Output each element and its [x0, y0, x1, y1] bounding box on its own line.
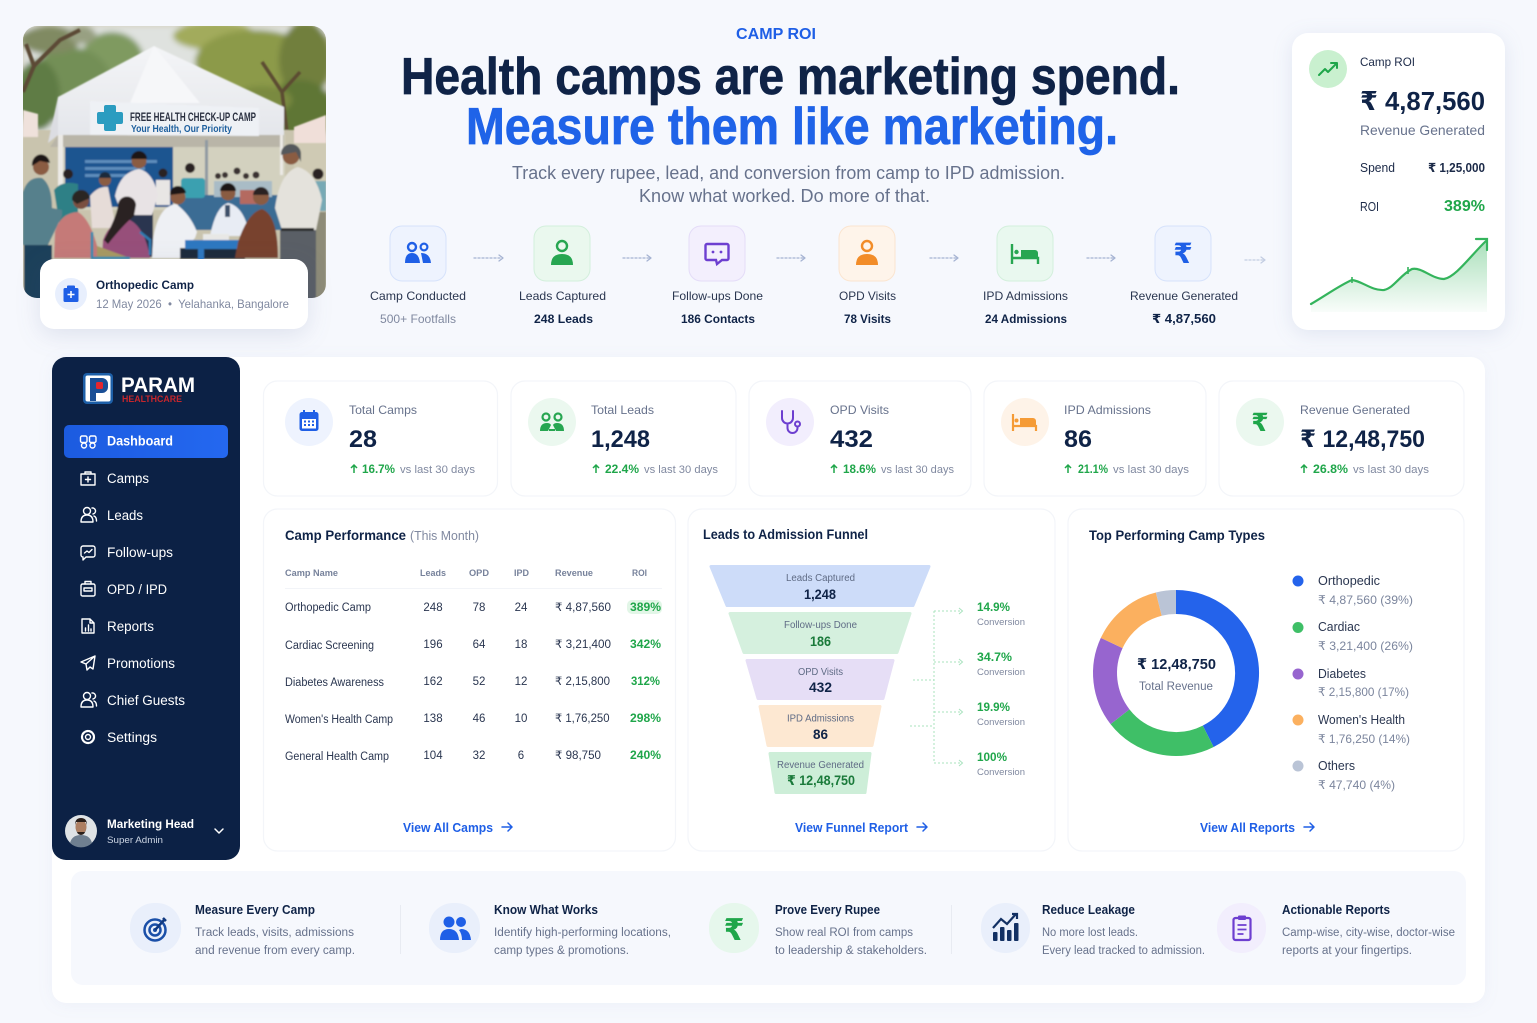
table rows: 18	[515, 639, 527, 651]
person: doctor facing	[210, 203, 250, 236]
legend: Cardiac	[1318, 620, 1360, 634]
funnel chart	[711, 566, 929, 792]
step: OPD visits	[839, 226, 896, 326]
KPI: total leads: Total Leads	[591, 403, 654, 417]
table header: Leads	[420, 568, 446, 578]
table rows: 196	[423, 639, 443, 651]
nav: reports: Reports	[107, 619, 154, 634]
table rows: 298%	[630, 713, 661, 725]
legend: ₹ 4,87,560 (39%)	[1318, 593, 1413, 607]
benefit: reduce leakage: Reduce Leakage	[1042, 903, 1135, 917]
KPI: total leads: 22.4%	[605, 464, 639, 476]
table rows: 312%	[631, 676, 660, 688]
person: seated pink	[54, 212, 100, 258]
conversion labels: 19.9%	[977, 700, 1010, 714]
KPI: IPD admissions: 86	[1064, 426, 1092, 453]
KPI: revenue generated: 26.8%	[1313, 464, 1348, 476]
KPI: OPD visits	[749, 381, 971, 496]
camp date and location: 12 May 2026 • Yelahanka, Bangalore	[96, 297, 289, 311]
person: white coat	[90, 187, 116, 228]
ROI row: ROI	[1360, 200, 1379, 214]
step: follow-ups done: Follow-ups Done	[672, 289, 763, 303]
table rows: ₹ 3,21,400	[555, 639, 611, 651]
nav: follow-ups: Follow-ups	[107, 545, 173, 560]
table rows	[285, 602, 661, 763]
funnel chart: ₹ 12,48,750	[787, 773, 855, 788]
step: revenue generated: ₹ 4,87,560	[1152, 312, 1216, 326]
table rows: 342%	[630, 639, 661, 651]
table rows: 32	[473, 750, 485, 762]
sparkline chart	[1311, 239, 1487, 312]
funnel chart: Leads Captured	[786, 573, 855, 584]
donut chart	[1105, 602, 1247, 744]
headline: Health camps are marketing spend.	[401, 48, 1180, 106]
benefit: know what works: Identify high-performing locations,	[494, 927, 671, 939]
user profile: Marketing Head	[107, 817, 194, 831]
KPI: revenue generated: Revenue Generated	[1300, 403, 1410, 417]
benefit: know what works	[429, 903, 671, 957]
heading: Camp Performance	[285, 528, 406, 543]
funnel chart: Revenue Generated	[777, 760, 864, 771]
subtitle	[512, 163, 1065, 206]
heading: Top Performing Camp Types	[1089, 528, 1265, 543]
table rows: Orthopedic Camp	[285, 602, 371, 614]
user profile	[65, 815, 223, 847]
link: view all camps: View All Camps	[403, 821, 493, 835]
donut centre: Total Revenue	[1139, 681, 1213, 693]
subtitle: Know what worked. Do more of that.	[639, 186, 930, 206]
step: IPD admissions	[983, 226, 1068, 326]
conversion labels: Conversion	[977, 717, 1025, 728]
step: revenue generated: Revenue Generated	[1130, 289, 1238, 303]
icon: hospital clipboard	[64, 286, 78, 302]
step: IPD admissions: 24 Admissions	[985, 312, 1067, 326]
table rows: 52	[473, 676, 485, 688]
step: revenue generated	[1130, 226, 1238, 326]
headline	[401, 48, 1180, 156]
benefit: actionable reports: reports at your fingertips.	[1282, 945, 1412, 957]
table rows: 162	[423, 676, 443, 688]
conversion labels: 100%	[977, 750, 1007, 764]
benefit: measure every camp	[130, 903, 355, 957]
table rows: 46	[473, 713, 485, 725]
KPI: total leads: 1,248	[591, 426, 650, 453]
legend: Others	[1318, 759, 1355, 773]
legend	[1292, 574, 1413, 792]
benefit: know what works: Know What Works	[494, 903, 598, 917]
conversion labels: 34.7%	[977, 650, 1012, 664]
panel: top performing camp types	[1068, 509, 1464, 851]
step: follow-ups done	[672, 226, 763, 326]
label: Camp ROI	[1360, 55, 1415, 69]
spend row	[1360, 161, 1485, 175]
table rows: 10	[515, 713, 527, 725]
cross icon	[97, 105, 123, 131]
banner heading: FREE HEALTH CHECK-UP CAMP	[130, 110, 256, 124]
conversion labels	[977, 600, 1025, 778]
subtitle: Track every rupee, lead, and conversion from camp to IPD admission.	[512, 163, 1065, 183]
person: doctor back	[152, 204, 197, 258]
link: view funnel report: View Funnel Report	[795, 821, 909, 835]
KPI: total camps	[264, 381, 498, 496]
benefit: measure every camp: and revenue from every camp.	[195, 945, 355, 957]
table header: OPD	[469, 568, 489, 578]
logo: HEALTHCARE	[122, 394, 182, 404]
step: leads captured: Leads Captured	[519, 289, 606, 303]
sidebar	[52, 357, 240, 860]
nav: dashboard active: Dashboard	[107, 434, 173, 448]
conversion labels: 14.9%	[977, 600, 1010, 614]
spend row: ₹ 1,25,000	[1428, 161, 1485, 175]
panel: funnel	[688, 509, 1055, 851]
step: camp conducted: 500+ Footfalls	[380, 312, 456, 326]
KPI: total leads	[511, 381, 736, 496]
nav: OPD / IPD: OPD / IPD	[107, 582, 167, 597]
chairs	[92, 232, 130, 258]
benefit: reduce leakage: No more lost leads.	[1042, 927, 1138, 939]
benefit: actionable reports: Actionable Reports	[1282, 903, 1390, 917]
person: left man	[24, 245, 52, 300]
legend: ₹ 3,21,400 (26%)	[1318, 639, 1413, 653]
benefit: prove every rupee	[709, 903, 927, 957]
table rows: Cardiac Screening	[285, 640, 374, 652]
arrow	[777, 255, 805, 261]
nav: settings: Settings	[107, 730, 157, 745]
legend: ₹ 1,76,250 (14%)	[1318, 732, 1410, 746]
conversion labels: Conversion	[977, 767, 1025, 778]
table rows: 248	[423, 602, 443, 614]
KPI: total camps: Total Camps	[349, 403, 417, 417]
donut centre	[1137, 656, 1216, 693]
benefit: measure every camp: Measure Every Camp	[195, 903, 315, 917]
table rows: 12	[515, 676, 527, 688]
person: right man	[280, 230, 316, 302]
table rows: 104	[423, 750, 443, 762]
table header: Camp Name	[285, 568, 338, 578]
table rows: Diabetes Awareness	[285, 677, 384, 689]
benefit: know what works: camp types & promotions.	[494, 945, 629, 957]
KPI: total camps: 16.7%	[362, 464, 395, 476]
KPI: total leads: vs last 30 days	[644, 464, 718, 476]
table header: Revenue	[555, 568, 593, 578]
funnel chart: 186	[810, 634, 831, 649]
funnel chart: 86	[813, 727, 828, 742]
nav: camps: Camps	[107, 471, 149, 486]
table header: IPD	[514, 568, 529, 578]
table rows: 78	[473, 602, 485, 614]
person: seated purple	[102, 220, 150, 258]
KPI: IPD admissions: IPD Admissions	[1064, 403, 1151, 417]
camp name: Orthopedic Camp	[96, 278, 194, 292]
nav: camps	[81, 471, 149, 486]
step: IPD admissions: IPD Admissions	[983, 289, 1068, 303]
funnel chart: IPD Admissions	[787, 714, 854, 724]
icon: trending up	[1309, 50, 1347, 88]
table rows: ₹ 4,87,560	[555, 602, 611, 614]
nav: chief guests: Chief Guests	[107, 693, 185, 708]
benefit: prove every rupee: Show real ROI from camps	[775, 927, 913, 939]
caption: Revenue Generated	[1360, 122, 1485, 138]
legend: Diabetes	[1318, 667, 1366, 681]
table rows: 6	[518, 750, 524, 762]
table rows: General Health Camp	[285, 751, 389, 763]
step: leads captured: 248 Leads	[534, 312, 593, 326]
banner tagline: Your Health, Our Priority	[131, 124, 232, 135]
table rows: Women's Health Camp	[285, 714, 393, 726]
heading: (This Month)	[410, 529, 479, 543]
link: view all reports: View All Reports	[1200, 821, 1295, 835]
logo: PARAM	[121, 374, 195, 397]
person: man centre	[127, 212, 153, 257]
KPI: total camps: 28	[349, 426, 377, 453]
table rows: 389%	[630, 602, 661, 614]
benefit: reduce leakage	[981, 903, 1205, 957]
table header	[285, 568, 647, 578]
arrow	[474, 255, 503, 261]
roi highlight	[627, 600, 662, 614]
legend: Orthopedic	[1318, 574, 1380, 588]
process flow	[370, 226, 1265, 326]
logo	[83, 373, 195, 404]
nav: promotions: Promotions	[107, 656, 175, 671]
step: revenue generated: ₹	[1173, 238, 1193, 269]
arrow	[930, 255, 958, 261]
KPI: revenue generated: ₹	[1251, 409, 1269, 437]
benefit: actionable reports: Camp-wise, city-wise, doctor-wise	[1282, 927, 1455, 939]
panel: camp performance table	[264, 509, 676, 851]
KPI: IPD admissions: 21.1%	[1078, 464, 1108, 476]
nav: OPD / IPD	[81, 582, 167, 597]
benefit: prove every rupee: Prove Every Rupee	[775, 903, 880, 917]
camp caption card	[40, 259, 308, 329]
conversion labels: Conversion	[977, 667, 1025, 678]
user profile: Super Admin	[107, 835, 163, 846]
person: brown	[235, 209, 278, 258]
arrow	[1087, 255, 1115, 261]
KPI: revenue generated: vs last 30 days	[1353, 464, 1430, 476]
eyebrow: CAMP ROI	[736, 26, 816, 43]
arrow	[623, 255, 651, 261]
heading: Leads to Admission Funnel	[703, 527, 868, 542]
legend: ₹ 2,15,800 (17%)	[1318, 685, 1409, 699]
KPI: total camps: vs last 30 days	[400, 464, 476, 476]
spend row: Spend	[1360, 161, 1395, 175]
headline: Measure them like marketing.	[466, 98, 1118, 156]
KPI: OPD visits: 432	[830, 426, 873, 453]
table rows: 64	[473, 639, 486, 651]
table rows: ₹ 1,76,250	[555, 713, 610, 725]
funnel chart: 1,248	[804, 587, 836, 602]
table rows: 24	[515, 602, 528, 614]
benefits band	[71, 871, 1466, 985]
funnel chart: 432	[809, 680, 832, 695]
step: OPD visits: OPD Visits	[839, 289, 896, 303]
nav: dashboard active	[64, 425, 228, 458]
ROI row	[1360, 198, 1485, 215]
benefit: actionable reports	[1217, 903, 1455, 957]
poster	[65, 147, 173, 207]
step: OPD visits: 78 Visits	[844, 312, 891, 326]
KPI: IPD admissions	[984, 381, 1206, 496]
benefit: prove every rupee: ₹	[724, 914, 744, 947]
legend: ₹ 47,740 (4%)	[1318, 778, 1395, 792]
panel: camp ROI	[1292, 33, 1505, 330]
value: ₹ 4,87,560	[1360, 86, 1485, 116]
camp photo	[16, 22, 334, 302]
KPI: OPD visits: OPD Visits	[830, 403, 889, 417]
table	[180, 248, 245, 259]
nav: leads	[81, 508, 143, 523]
donut centre: ₹ 12,48,750	[1137, 656, 1216, 673]
conversion labels: Conversion	[977, 617, 1025, 628]
legend: Women's Health	[1318, 713, 1405, 727]
benefit: prove every rupee: to leadership & stakeholders.	[775, 945, 927, 957]
banner	[90, 120, 260, 137]
table rows: 138	[423, 713, 443, 725]
conversion connectors	[910, 608, 962, 766]
step: follow-ups done: 186 Contacts	[681, 312, 755, 326]
main dashboard panel	[52, 357, 1485, 1003]
funnel chart: Follow-ups Done	[784, 620, 857, 631]
step: camp conducted	[370, 226, 466, 326]
nav: reports	[82, 619, 154, 634]
side tents	[23, 110, 38, 137]
funnel chart: OPD Visits	[798, 667, 843, 678]
table rows: 240%	[630, 750, 661, 762]
KPI: OPD visits: 18.6%	[843, 464, 876, 476]
table rows: ₹ 2,15,800	[555, 676, 610, 688]
benefit: reduce leakage: Every lead tracked to admission.	[1042, 945, 1205, 957]
step: leads captured	[519, 226, 606, 326]
benefit: measure every camp: Track leads, visits, admissions	[195, 927, 354, 939]
step: camp conducted: Camp Conducted	[370, 289, 466, 303]
nav: leads: Leads	[107, 508, 143, 523]
ROI row: 389%	[1444, 198, 1485, 215]
KPI: IPD admissions: vs last 30 days	[1113, 464, 1190, 476]
nav: settings	[82, 730, 157, 745]
tent roof	[58, 46, 284, 140]
KPI: OPD visits: vs last 30 days	[881, 464, 954, 476]
KPI: revenue generated	[1219, 381, 1464, 496]
table header: ROI	[632, 568, 647, 578]
table rows: ₹ 98,750	[555, 750, 601, 762]
KPI: revenue generated: ₹ 12,48,750	[1300, 426, 1425, 453]
back crowd	[178, 195, 283, 230]
arrow	[1245, 257, 1265, 263]
heading	[285, 528, 479, 543]
